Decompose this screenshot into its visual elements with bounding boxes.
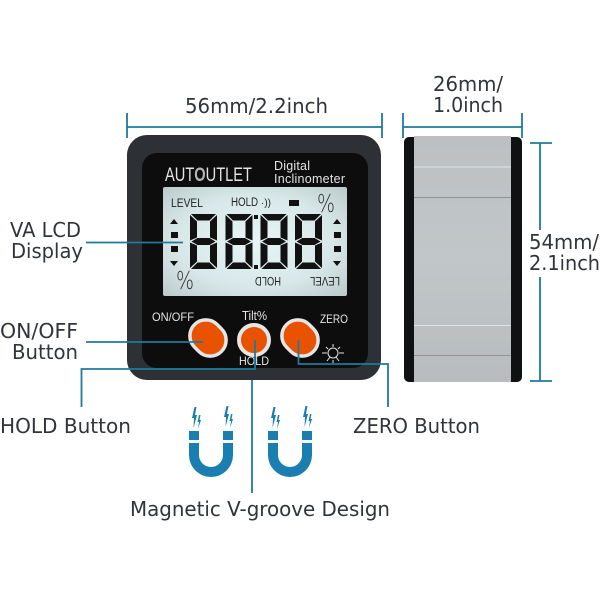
- black side body: [404, 137, 522, 382]
- callout label: Magnetic V-groove Design: Magnetic V-groove Design: [130, 497, 390, 521]
- tilt label: Tilt%: [242, 309, 267, 323]
- silver panel: [414, 136, 511, 382]
- percent top: %: [317, 189, 335, 218]
- callout label: HOLD Button: HOLD Button: [0, 414, 131, 438]
- sound icon: ·)): [261, 198, 271, 209]
- callout label: ON/OFF Button: [0, 319, 78, 364]
- on/off button label: ON/OFF: [152, 310, 194, 324]
- seven segment digits: [190, 214, 322, 269]
- icon: right magnet: [268, 406, 312, 477]
- dimension label: 56mm: 56mm/2.2inch: [185, 94, 328, 118]
- device: side view: [404, 136, 522, 382]
- hold inverted label: HOLD: [255, 274, 281, 286]
- product name second line: Inclinometer: [274, 172, 345, 186]
- product name: Digital: [274, 159, 310, 173]
- device inner bezel: [142, 153, 368, 368]
- zero button: [275, 313, 325, 363]
- backlight icon: [322, 344, 344, 363]
- callout line: ON/OFF: [86, 341, 203, 343]
- device: front view: [127, 135, 381, 380]
- panel: LCD display: [163, 187, 347, 296]
- hold label: HOLD: [231, 197, 258, 209]
- callout line: VA LCD: [86, 242, 183, 244]
- callout label: ON/OFF Button: ON/OFF: [0, 319, 78, 343]
- battery icon: [289, 200, 299, 206]
- hold label under button: HOLD: [239, 354, 269, 368]
- icon: left magnet: [189, 406, 233, 477]
- dimension label: 1.0inch: 1.0inch: [433, 93, 503, 117]
- on/off button: [183, 313, 233, 363]
- dimension label: 26mm: 26mm/: [433, 72, 503, 96]
- dimension: height side: [530, 143, 552, 381]
- dimension: depth side: [403, 113, 522, 138]
- callout label: ZERO Button: ZERO Button: [353, 414, 480, 438]
- callout label: VA LCD Display: [10, 218, 83, 263]
- right indicators: [333, 219, 341, 266]
- device outer body: [127, 135, 381, 380]
- level label: LEVEL: [171, 198, 204, 210]
- callout label: VA LCD Display: Display: [11, 239, 83, 263]
- zero label: ZERO: [320, 312, 348, 326]
- dimension label: 54mm: 54mm/: [529, 230, 599, 254]
- dimension: width front: [127, 113, 382, 138]
- hold button: [239, 325, 269, 355]
- callout line: magnetic groove: [251, 380, 253, 493]
- percent bottom: %: [176, 266, 194, 295]
- callout label: ON/OFF Button: Button: [12, 340, 78, 364]
- callout line: ZERO: [298, 340, 388, 407]
- callout line: HOLD: [82, 340, 255, 407]
- brand logo: AUTOUTLET: [165, 165, 252, 186]
- callout label: VA LCD Display: VA LCD: [10, 218, 81, 242]
- level inverted label: LEVEL: [310, 274, 340, 286]
- left indicators: [170, 219, 178, 266]
